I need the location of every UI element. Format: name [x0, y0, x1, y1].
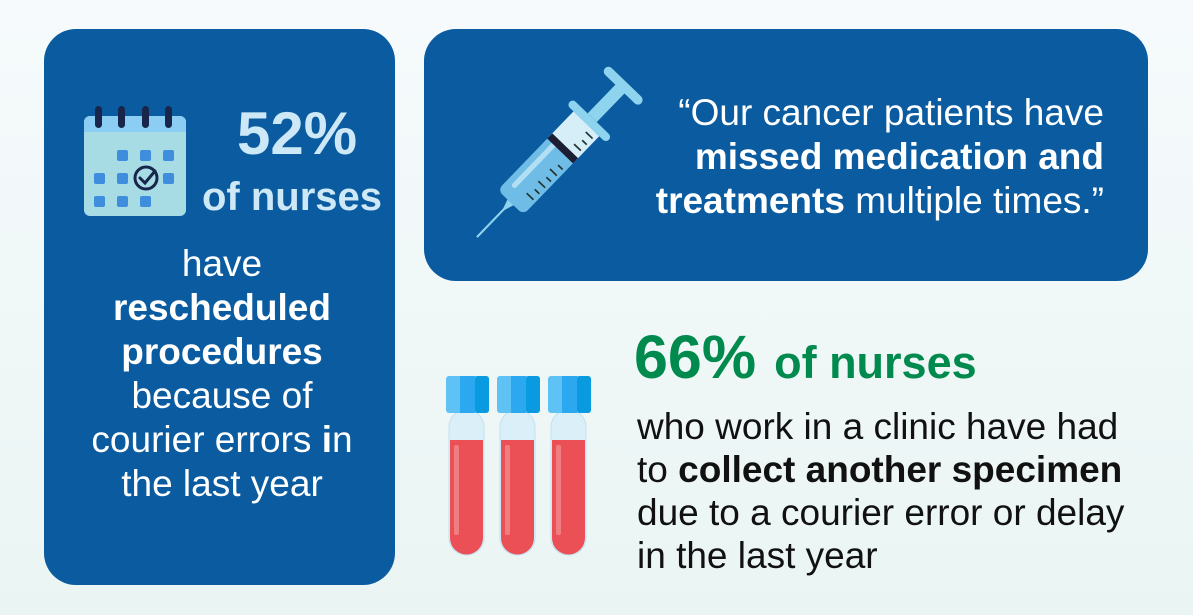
- quote text: treatments multiple times.”: [656, 180, 1104, 221]
- text block: rescheduled procedures: the last year: [121, 463, 323, 504]
- icon: calendar: [84, 106, 186, 216]
- stat label: of nurses: of nurses: [202, 175, 382, 219]
- text block: rescheduled procedures: [91, 243, 353, 504]
- text block: rescheduled procedures: procedures: [121, 331, 323, 372]
- text block: collect another specimen: [637, 406, 1124, 576]
- text block: rescheduled procedures: because of: [131, 375, 313, 416]
- text block: rescheduled procedures: courier errors in: [91, 419, 353, 460]
- panel: quote: [424, 29, 1148, 281]
- stat heading: 66% of nurses: 66% of nurses: [634, 323, 977, 391]
- text block: collect another specimen: in the last year: [637, 535, 878, 576]
- stat: 52%: 52%: [237, 100, 357, 167]
- text block: collect another specimen: who work in a clinic have had: [637, 406, 1118, 447]
- panel: left stat: [44, 29, 395, 585]
- text block: collect another specimen: due to a courier error or delay: [637, 492, 1124, 533]
- quote text: “Our cancer patients have: [678, 92, 1104, 133]
- text block: collect another specimen: to collect another specimen: [637, 449, 1122, 490]
- icon: syringe: [476, 66, 643, 238]
- text block: rescheduled procedures: have: [182, 243, 262, 284]
- quote text: [656, 92, 1104, 221]
- quote text: missed medication and: [695, 136, 1104, 177]
- icon: test tubes: [446, 376, 591, 556]
- text block: rescheduled procedures: rescheduled: [113, 287, 331, 328]
